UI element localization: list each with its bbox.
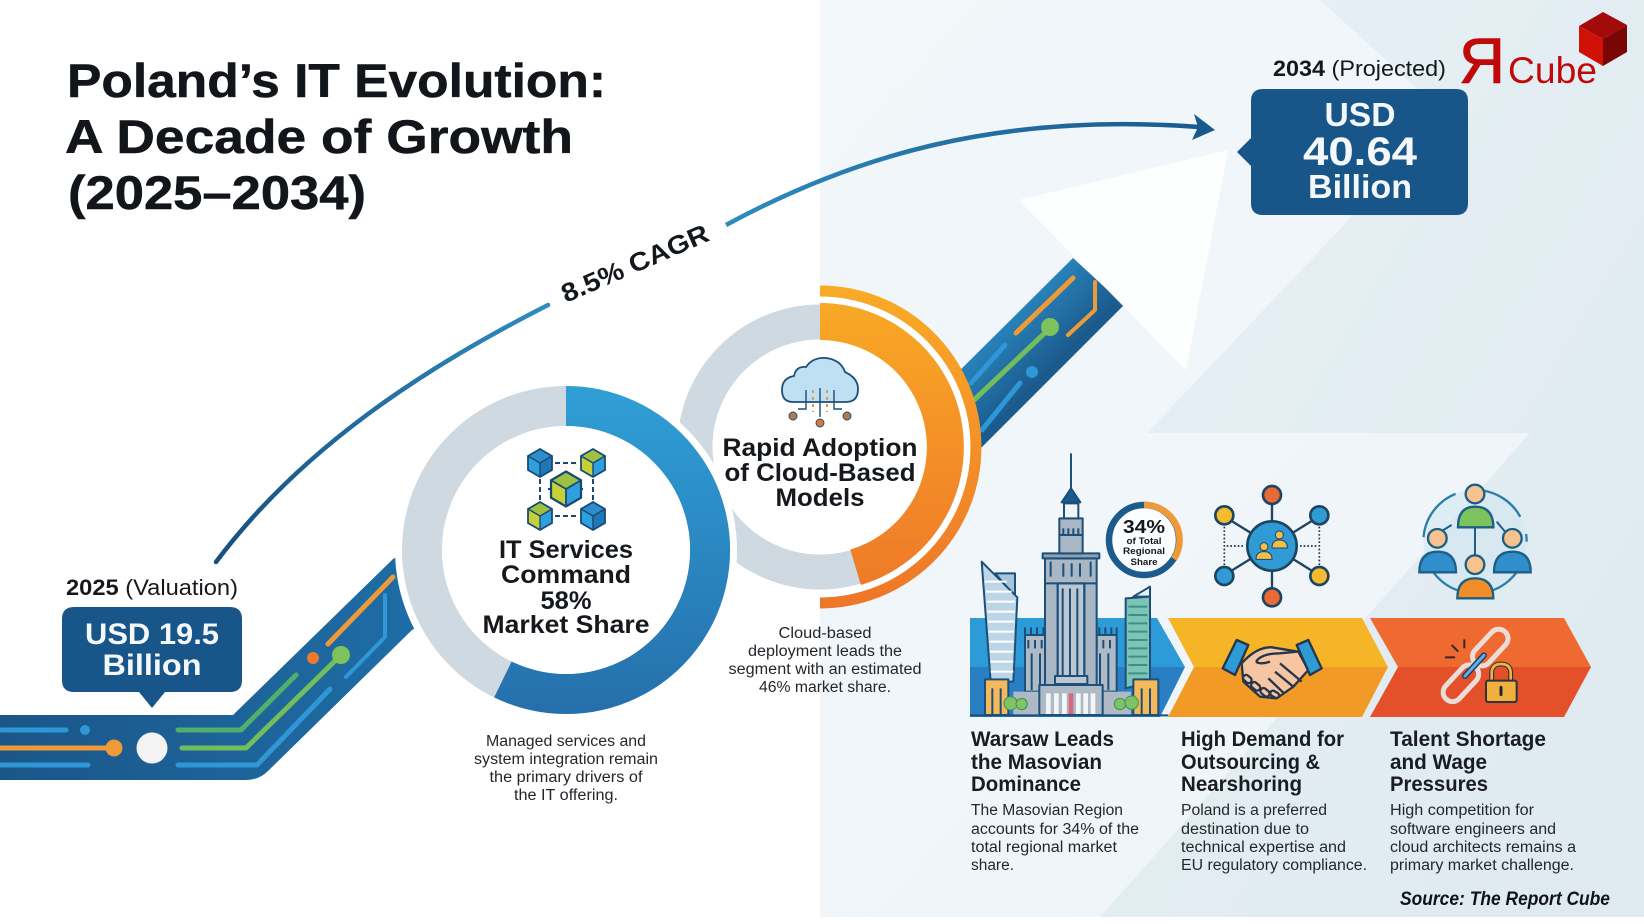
- column: Warsaw: the Masovian: [971, 750, 1102, 774]
- column: Warsaw: share.: [971, 857, 1014, 874]
- column: outsourcing: High Demand for: [1181, 727, 1345, 751]
- chevron: blue: [970, 618, 1185, 717]
- donut 2 heading: Models: [776, 484, 864, 512]
- title: (2025–2034): [68, 166, 366, 219]
- column: talent: High competition for: [1390, 802, 1534, 819]
- column: Warsaw: total regional market: [971, 839, 1118, 856]
- icon: outsourcing network: [1215, 486, 1328, 606]
- column: outsourcing: Outsourcing &: [1181, 750, 1320, 774]
- column: Warsaw: [971, 727, 1139, 874]
- donut 1 heading: Market Share: [482, 611, 650, 639]
- column: talent: cloud architects remains a: [1390, 839, 1576, 856]
- column: outsourcing: Nearshoring: [1181, 772, 1302, 796]
- donut 2 caption: deployment leads the: [748, 643, 902, 660]
- donut 2 heading: of Cloud-Based: [724, 459, 916, 487]
- donut 1 caption: the primary drivers of: [490, 769, 643, 786]
- donut chart: IT services 58% share: [395, 379, 737, 721]
- 2034 value callout: 40.64: [1303, 130, 1418, 174]
- growth arc arrow: [216, 114, 1215, 562]
- title: [65, 54, 606, 219]
- background panel: [820, 0, 1644, 917]
- donut 2 heading: [722, 434, 918, 512]
- 2034 value callout: [1237, 89, 1468, 215]
- donut 2 caption: 46% market share.: [759, 679, 891, 696]
- donut 2 caption: [728, 625, 922, 696]
- 2025 value callout: USD 19.5: [85, 618, 219, 651]
- icon: team hierarchy: [1419, 485, 1531, 598]
- donut 2 caption: segment with an estimated: [728, 661, 922, 678]
- donut 1 caption: [474, 733, 658, 804]
- column: talent: software engineers and: [1390, 821, 1556, 838]
- chevron: red: [1370, 618, 1591, 717]
- column: outsourcing: destination due to: [1181, 821, 1309, 838]
- 2025 valuation label: 2025 (Valuation): [66, 575, 238, 600]
- donut 1 caption: Managed services and: [486, 733, 646, 750]
- icon: handshake: [1223, 640, 1322, 699]
- column: Warsaw: Warsaw Leads: [971, 727, 1114, 751]
- chevron: orange: [1168, 618, 1388, 717]
- 2034 value callout: Billion: [1308, 168, 1412, 205]
- icon: connected cubes: [528, 449, 605, 530]
- donut 1 heading: [482, 536, 650, 639]
- source note: Source: The Report Cube: [1400, 889, 1610, 910]
- donut 2 caption: Cloud-based: [778, 625, 872, 642]
- logo: Report Cube: Cube: [1508, 50, 1597, 91]
- 34% regional share badge: Regional: [1123, 546, 1165, 556]
- 2025 value callout: [62, 607, 242, 708]
- timeline ribbon: lower circuit band: [0, 520, 460, 780]
- donut 2 heading: Rapid Adoption: [722, 434, 918, 462]
- column: talent: Pressures: [1390, 772, 1488, 796]
- icon: Warsaw skyline: [970, 453, 1168, 715]
- timeline ribbon: upper circuit band: [930, 150, 1228, 475]
- logo: Report Cube: Я: [1459, 25, 1505, 97]
- 34% regional share badge: of Total: [1126, 536, 1162, 546]
- logo: Report Cube: [1459, 12, 1627, 97]
- column: Warsaw: Dominance: [971, 772, 1081, 796]
- title: A Decade of Growth: [65, 110, 573, 163]
- 2034 projected label: 2034 (Projected): [1273, 56, 1446, 81]
- column: talent: primary market challenge.: [1390, 857, 1574, 874]
- column: Warsaw: The Masovian Region: [971, 802, 1123, 819]
- column: Warsaw: accounts for 34% of the: [971, 821, 1139, 838]
- 34% regional share badge: Share: [1130, 557, 1158, 567]
- column: outsourcing: EU regulatory compliance.: [1181, 857, 1367, 874]
- donut 1 heading: IT Services: [499, 536, 633, 564]
- 34% regional share badge: 34%: [1123, 517, 1165, 537]
- column: outsourcing: [1181, 727, 1367, 874]
- 2025 value callout: Billion: [102, 649, 202, 682]
- donut 1 caption: the IT offering.: [514, 787, 618, 804]
- title: Poland’s IT Evolution:: [67, 54, 606, 107]
- donut 1 heading: 58%: [540, 587, 592, 615]
- donut 1 heading: Command: [501, 561, 631, 589]
- 2034 value callout: USD: [1324, 96, 1396, 133]
- column: outsourcing: technical expertise and: [1181, 839, 1346, 856]
- donut 1 caption: system integration remain: [474, 751, 658, 768]
- column: outsourcing: Poland is a preferred: [1181, 802, 1327, 819]
- icon: broken chain and lock: [1439, 625, 1517, 705]
- icon: cloud: [782, 358, 858, 427]
- 34% regional share badge: [1109, 505, 1180, 575]
- column: talent: [1390, 727, 1576, 874]
- column: talent: Talent Shortage: [1390, 727, 1546, 751]
- donut chart: cloud 46% share: [669, 291, 976, 603]
- column: talent: and Wage: [1390, 750, 1487, 774]
- CAGR label: 8.5% CAGR: [556, 218, 714, 309]
